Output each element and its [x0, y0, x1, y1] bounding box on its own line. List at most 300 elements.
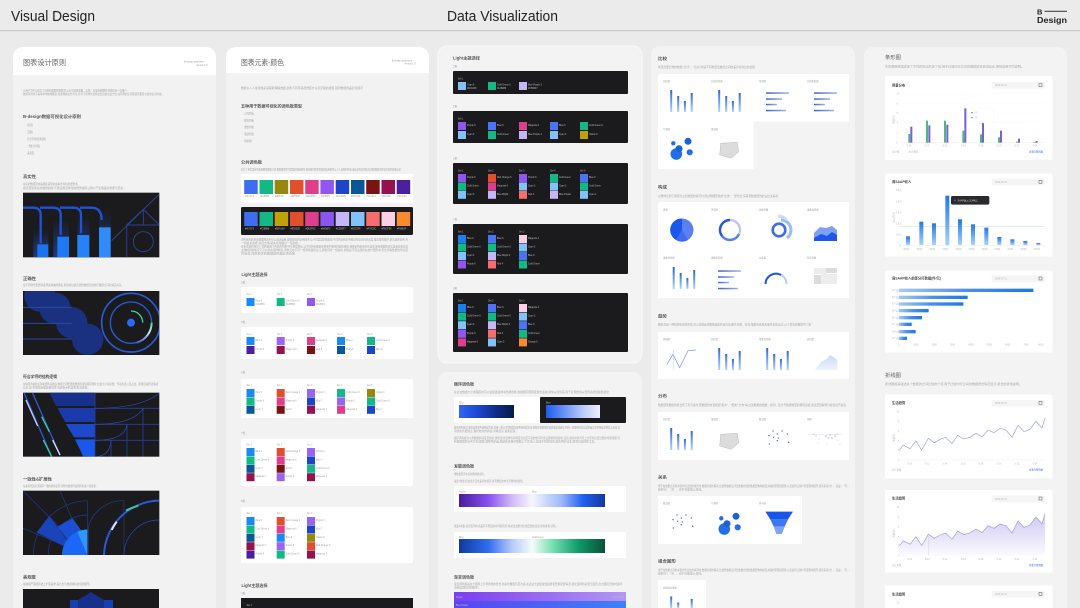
section: composition [658, 184, 849, 298]
dark palette: 3 rows: Set 4 [550, 170, 556, 172]
dark palette: 3 colors: #12B886 [497, 88, 507, 90]
section: composition: 以整体比例了解部分占比数据的情况时,通过构图形成的"比重"、"部分比"来呈现数据结构的占比关系的 [658, 194, 778, 198]
dark palette: 3 colors [453, 64, 628, 94]
principle list: · 一致性与扩展性 [26, 144, 40, 148]
dark palette: 3 rows [453, 156, 628, 204]
section: trend: 面积图 [807, 337, 815, 341]
light palette: 5 rows: Magenta 6 [286, 527, 297, 530]
card: grouped bar chart: 10 [897, 93, 900, 95]
light palette: 5 rows: Set 3 [307, 512, 313, 515]
panel: dark theme palettes [438, 46, 642, 363]
card: MAP bar chart with tooltip: 06/01 [1008, 249, 1014, 251]
dark palette: 3 rows: Set 3 [519, 170, 525, 172]
card: grouped bar chart: 6 [897, 113, 899, 115]
light palette: 5 rows: 8色 [241, 499, 246, 503]
card: horizontal bar chart: H产品 [892, 336, 899, 340]
dark palette: 3 rows: Magenta 6 [497, 184, 509, 187]
card: MAP bar chart with tooltip: 0.5万 [896, 233, 902, 236]
card: MAP bar chart with tooltip: 05/28 [956, 249, 962, 251]
gradient swatches [454, 592, 626, 608]
section: relation [658, 474, 851, 544]
section: distribution: 分布 [658, 392, 667, 400]
dark palette: 4 rows: Blue 6 [497, 238, 504, 240]
sequential ramp light: Blue [459, 402, 464, 404]
dark palette swatches: #FBCFE6 [382, 228, 392, 230]
light palette: 5 rows: Set 1 [246, 512, 253, 515]
panel: chart elements colour: Version 1.0 [404, 62, 416, 66]
panel: chart elements colour: B-design guidelines [392, 60, 413, 62]
dark palette: 3 rows: Red 4 [528, 194, 535, 196]
card: area chart: 5-22 [1015, 559, 1020, 561]
card: line chart: 5-16 [961, 463, 966, 465]
light palette: 3 rows: Yellow 6 [376, 392, 385, 394]
card: line chart: 5-22 [1015, 463, 1020, 465]
light palette: 2 rows: Magenta 8 [286, 348, 297, 351]
heading: Visual Design: Visual Design [11, 9, 95, 25]
card: line chart: 5-14 [943, 463, 948, 465]
light palette: 4 rows: Magenta 6 [286, 458, 297, 461]
dark palette: 4 rows: Blue 6 [467, 238, 474, 240]
card: grouped bar chart: 总计费用 [909, 150, 919, 154]
panel: chart examples [864, 47, 1067, 608]
card: line chart: 5-10 [907, 463, 913, 465]
dark palette: 4 rows: Set 3 [519, 230, 525, 234]
chart: bars in trend [718, 348, 741, 370]
section: distribution: 柱状图 [663, 417, 671, 421]
light palette: 5 rows: Blue 6 [286, 537, 293, 539]
card: grouped bar chart: 8 [897, 103, 899, 105]
image: pipes and columns [23, 193, 159, 257]
usage paragraph: 并且深,浅色模式的数据颜色都必须清晰 [241, 252, 295, 256]
panel: chart elements colour: 在几个场景里多色调用图形都能分辨,根据数据不同类型的调用顺序,保持相同视觉层级和使用顺序以人人使用的色彩,保证多色彩的情况,调研数据可视化的颜色数量比率 [241, 168, 401, 172]
light palette swatches: #4071F5 [245, 196, 255, 198]
card: MAP bar chart with tooltip: 05/30 [982, 249, 988, 251]
card: grouped bar chart: 5-24 [1033, 146, 1038, 148]
dark palette: 3 rows: Cyan 3 [559, 185, 567, 187]
panel: chart examples: 条形图用来描述多个不同的对比的多个值,用于比较时行之间的数据增长情况显示,便捷使用不同说明。 [885, 64, 1024, 68]
dark palette: 5 rows: Blue 6 [497, 307, 504, 309]
heading: line charts: 折线图 [885, 371, 901, 379]
card: line chart: 0 [898, 460, 900, 462]
section: relation: 用于在数据之间的关联分析比较的情况时,数据内部的联系,比如两数据之间及数据内部的数据结构构成及关联的原因和结果,以及如何让用户有逻辑地展开,用手来说"对......还是"、"有...... [658, 484, 851, 488]
light palette: 4 rows: Purple 6 [286, 475, 295, 478]
heading: sequential: 顺序调色板 [454, 380, 475, 388]
card: horizontal bar chart: 5000 [987, 345, 993, 347]
section: composition: 环形图 [711, 208, 719, 212]
light palette: 5 rows: Cyan 7 [256, 537, 264, 539]
card: line chart: 总计用量 [892, 467, 902, 471]
card: grouped bar chart: 2 [897, 132, 899, 134]
section: trend: 折线图 [663, 337, 671, 341]
light palette swatches: #9256F0 [321, 196, 331, 198]
section: composition: 玫瑰环图 [759, 208, 769, 212]
light palette: 4 rows: Blue 6 [256, 451, 263, 453]
light palette swatches: #98870F [275, 196, 285, 198]
principle list [26, 123, 46, 155]
card: MAP bar chart with tooltip: 06/02 [1021, 249, 1027, 251]
panel: sequential, diverging and gradient palettes [438, 372, 642, 608]
palette type list: · 顺序调色板 [243, 118, 254, 122]
light palette: 3 rows: Purple 6 [346, 399, 355, 402]
dark palette: 3 rows: Cold Green [467, 184, 479, 187]
section: composition: 堆叠柱状图 [663, 256, 675, 260]
chart: pie [670, 218, 694, 242]
principle list: · 真实性 [26, 123, 33, 127]
light palette: 3 colors: Blue 6 [256, 300, 263, 302]
card: area chart: 5-24 [1033, 559, 1038, 561]
card: horizontal bar chart: E产品 [892, 315, 899, 319]
card: MAP bar chart with tooltip: 05/31 [995, 249, 1001, 251]
card: grouped bar chart: 5-18 [979, 146, 984, 148]
dark palette: 3 rows: 6色 [453, 156, 458, 160]
heading: 5: 美观度 [23, 574, 37, 580]
light palette: 3 rows: Set 5 [367, 384, 373, 387]
diverging ramp: purple to blue: Purple [459, 490, 466, 494]
principle list: · 美观度 [26, 151, 34, 155]
section: combination: 柱线混合图表 [663, 586, 677, 590]
sequential notes: 判断数据的分布方向,根据,调整色阶差,能够在使用时根据上下文可以,适应不同的情况,避免色阶过多,增强可读性的工具。 [454, 440, 597, 444]
card: horizontal bar chart: 4000 [968, 345, 974, 347]
panel: sequential, diverging and gradient palettes: 渐变调色板是在大面积上引导视线的形式,色彩优雅更有层次感,在表达大的连续性趋势和形象配置情况,建议选择色彩更为强烈,在大面积比较时选择 [454, 582, 622, 586]
section: relation: 漏斗图 [759, 501, 767, 505]
dark palette: 5 rows: Set 1 [458, 300, 464, 302]
light palette: 4 rows: Set 1 [246, 444, 253, 446]
light palette: 3 rows: Cold Green 6 [376, 399, 390, 402]
dark strip at the bottom: Set 1 [246, 604, 253, 607]
section: trend: 柱状图 [711, 337, 719, 341]
light palette: 5 rows: Cold Green 6 [286, 553, 300, 556]
light palette: 3 rows: Red Orange 6 [286, 391, 301, 394]
chart: grouped horizontal bars [814, 92, 837, 111]
chart: line [667, 350, 696, 369]
chart: scatter [768, 430, 789, 445]
light palette: 3 rows: Set 3 [307, 384, 313, 387]
dark palette: 2 rows: Set 1 [458, 118, 464, 120]
card: line chart: 5-24 [1033, 463, 1038, 465]
dark palette: 4 rows: Set 1 [458, 230, 464, 234]
heading: 2: 正确性 [23, 275, 37, 282]
section: composition: 矩形树图 [807, 256, 817, 260]
light palette: 2 rows: 5色 [241, 320, 246, 324]
card: area chart: 8 [898, 517, 900, 519]
light palette: 2 rows: Set 3 [307, 333, 313, 336]
panel: sequential, diverging and gradient palettes: 渐变2色板:适合表现中点差异不明显的中间值情况,色彩过渡相对比较自然的过渡,用色柔和,清晰。 [454, 524, 558, 528]
section: comparison: 雷达图 [711, 127, 719, 131]
dark palette: 5 rows: Set 3 [519, 300, 525, 302]
heading: light theme: Light主题选择 [242, 271, 268, 278]
gradient swatches: Blue Purple [456, 604, 469, 607]
card: line chart: 用量(次) [891, 433, 895, 442]
dark palette: 2 rows: Cold Green [497, 133, 509, 136]
section: distribution: 地图 [807, 417, 812, 421]
dark palette: 5 rows: 8色 [453, 286, 458, 290]
light palette: 3 rows: Magenta 7 [316, 408, 328, 411]
diverging ramp: blue to green [454, 532, 626, 558]
card: horizontal bar chart: 6000 [1005, 345, 1011, 347]
usage paragraph: 一组最多选择,并且合理,避免使用超过一定颜色。 [241, 241, 301, 245]
light palette: 2 rows: Cyan 8 [346, 349, 354, 351]
dark palette: 2 rows: Cyan 3 [467, 134, 475, 136]
light palette: 5 rows: Purple 6 [316, 519, 325, 522]
dark palette swatches: #DE3F8C [306, 228, 316, 230]
dark palette swatches: #F76C6C [366, 228, 377, 230]
panel: sequential, diverging and gradient palettes: 清晰度更高的数字。 [454, 586, 481, 590]
principle list: · 符合字特的结构逻辑 [26, 137, 46, 141]
chart: stacked area [814, 226, 837, 241]
intro text [23, 88, 164, 96]
panel: chart types [651, 46, 855, 608]
dark palette: 5 rows: Cold Green [528, 332, 540, 335]
heading: 3: 符合字特的结构逻辑 [23, 373, 58, 380]
light palette: 2 rows: Set 2 [277, 333, 283, 336]
dark palette: 2 rows: Cold Green 6 [589, 124, 603, 127]
light palette: 3 rows: Cold Green 6 [346, 391, 360, 394]
section: comparison: 常见需要比较的数据,"比不"、"比好"的是不同类型及数值之间的差异化对比的表格 [658, 65, 755, 69]
heading: diverging: 发散调色板 [454, 462, 475, 470]
dark palette: 5 rows: Purple 6 [467, 332, 476, 335]
light palette: 3 rows: Red 8 [286, 409, 293, 411]
card: line chart: 5-20 [997, 463, 1002, 465]
dark palette: 4 rows: Magenta 2 [528, 237, 540, 240]
panel: chart design principles: 真实的数据反映是图表呈现的基本条件和重要要求。 [23, 182, 80, 186]
dark palette: 3 rows: Blue Purple [559, 193, 572, 196]
dark palette swatches: #4071F5 [245, 228, 255, 230]
heading: bar charts: 条形图 [885, 53, 901, 61]
logo: B Design [1037, 8, 1067, 25]
card: horizontal bar chart: G产品 [892, 329, 899, 333]
card: grouped bar chart: 5-14 [943, 146, 948, 148]
dark palette: 2 rows: Blue Purple 3 [528, 133, 543, 136]
card: horizontal bar chart: 周SAAP收入前等分打数据(件/元) [892, 276, 941, 281]
card: area chart: 2 [898, 546, 900, 548]
panel: chart design principles [13, 47, 216, 608]
light palette: 2 rows: Red 8 [316, 349, 323, 351]
light palette: 3 colors: #9256F0 [316, 304, 326, 306]
sequential notes [454, 426, 620, 444]
light palette: 3 rows: Set 4 [337, 384, 343, 387]
light palette: 3 rows: Cyan 7 [256, 409, 264, 411]
header bar [0, 8, 1080, 31]
card: MAP bar chart with tooltip: 2.0万 [896, 200, 902, 203]
dark palette: 5 rows: Blue Bright 3 [497, 323, 511, 326]
card: MAP bar chart with tooltip: 0 [899, 245, 901, 247]
dark palette: 5 rows: Blue 6 [467, 307, 474, 309]
dark palette: 3 colors: 3色 [453, 64, 458, 68]
card: line chart: 2 [898, 450, 900, 452]
card: grouped bar chart: 20 [975, 113, 978, 115]
dark palette: 3 rows: Cold Green [589, 184, 601, 187]
sequential notes: 字颜色也要随之,保持较好的阅读,清晰度高,避免混淆。 [454, 429, 518, 433]
sequential ramp dark: Blue [546, 402, 551, 404]
diverging ramp: purple to blue: Blue [532, 492, 537, 494]
panel: chart design principles: Version 1.0 [196, 64, 208, 67]
dark palette: 3 rows: Set 5 [580, 170, 586, 172]
dark palette swatches [241, 207, 413, 235]
card: cropped line chart: 10 [897, 603, 900, 605]
light palette: 3 rows: Set 1 [246, 384, 253, 387]
card: area chart: 生活趋势 [892, 496, 906, 501]
panel: chart design principles: 在多场景里必须保持一致的视觉表现,同样的数据传递相同的语义和感受。 [23, 484, 98, 488]
card: MAP bar chart with tooltip: 06/03 [1034, 249, 1041, 251]
card: area chart: 6 [898, 527, 900, 529]
dark strip at the bottom [241, 592, 413, 608]
panel: sequential, diverging and gradient palettes: 在表达数据大小或程度时可以使用连续的单色调色板,色相相同而明度依次递减,通常从浅到深,用于表现数值从低到高的连续性变化 [454, 390, 609, 394]
light palette swatches: #E0502D [290, 196, 300, 198]
intro text: 以用户为中心建立了清晰的数据视觉原则,让信息能够准确、高效、直接地被理解,传递给每一位用户。 [23, 88, 129, 92]
dark palette: 2 rows: Blue 6 [497, 125, 504, 127]
card: line chart: 2024-07-01 [995, 403, 1008, 405]
dark palette: 3 colors: Cold Green 6 [497, 84, 511, 86]
dark palette: 2 rows [453, 104, 628, 143]
light palette: 2 rows: Blue 8 [376, 349, 383, 351]
section: comparison: 气泡图 [663, 127, 671, 131]
card: area chart: 查看完整明细 [1029, 563, 1044, 567]
light palette swatches: #96124E [382, 196, 391, 198]
card: MAP bar chart with tooltip: 2.5万 [896, 189, 902, 192]
light palette: 3 rows: Blue 6 [256, 392, 263, 394]
card: horizontal bar chart: D产品 [892, 308, 899, 312]
chart: bars distribution [670, 428, 693, 450]
dark palette: 3 rows: Cold Green [559, 176, 571, 179]
card: area chart: 5-10 [907, 559, 913, 561]
panel: chart design principles: 在确保严谨的基础上扩展美学,设计出与数据相得益彰的图形。 [23, 582, 92, 586]
light palette: 3 rows: Blue 7 [316, 400, 323, 402]
dark palette: 3 rows: Red Orange 6 [497, 176, 512, 179]
dark palette: 4 rows: Blue 6 [528, 255, 535, 257]
dark palette: 3 colors: #C5B6F7 [528, 88, 538, 90]
dark palette: 4 rows: 7色 [453, 218, 458, 222]
sequential notes: 顺序调色板时,通常选择单色或相近色系,使用一组以不同明度及颜色饱和度变化,能够体现数据的递增或递减趋势,色相一定要保持对比度的差异化并保证在明度上变化,文 [454, 426, 620, 430]
light palette: 2 rows [241, 320, 413, 359]
light palette: 3 rows: Magenta 6 [346, 408, 358, 411]
chart: stacked horizontal bars [718, 270, 741, 289]
section: relation: 气泡图 [711, 501, 719, 505]
light palette: 4 rows: 7色 [241, 431, 246, 435]
palette type list: · 渐变调色板 [243, 132, 254, 136]
logo: B Design: B [1037, 8, 1043, 16]
card: MAP bar chart with tooltip: SAAP收入:3,344元 [958, 198, 978, 202]
light palette: 5 rows: Purple 8 [256, 553, 265, 556]
section: trend [658, 312, 849, 379]
panel: chart design principles: 在不同场景里能够选择最准确的图表,能够通过最直观的数据比较揭示数据之间的真实关系。 [23, 283, 124, 287]
dark palette: 5 rows: Cold Green 6 [497, 315, 511, 318]
card: grouped bar chart: 5-20 [997, 146, 1002, 148]
card: area chart: 总计用量 [892, 563, 902, 567]
chart: scatter relation [672, 514, 693, 529]
light palette: 3 colors: 3色 [241, 280, 246, 284]
section: comparison: 柱状图 [663, 79, 671, 83]
light palette: 2 rows: Set 5 [367, 333, 373, 336]
card: horizontal bar chart: A产品 [892, 288, 899, 292]
panel title: 图表设计原则 [23, 57, 66, 67]
card: horizontal bar chart: F产品 [892, 322, 899, 326]
chart: stacked bars in trend [766, 348, 789, 370]
card: area chart: 5-20 [997, 559, 1002, 561]
light palette: 3 rows [241, 370, 413, 418]
card: area chart: 5-16 [961, 559, 966, 561]
light palette: 3 rows: 6色 [241, 370, 246, 374]
card: MAP bar chart with tooltip: 05/26 [929, 249, 936, 251]
light palette: 4 rows: Blue 7 [316, 459, 323, 461]
light palette: 2 rows: Blue 6 [256, 340, 263, 342]
dark palette swatches: #BFA10A [275, 228, 285, 230]
light palette: 4 rows: Cyan 7 [256, 468, 264, 470]
card: area chart: 4 [898, 536, 900, 538]
section: composition: 堆叠条形图 [711, 256, 723, 260]
panel: sequential, diverging and gradient palettes: 渐变1色板:适合表示正负差异的情况,具有明显的中点与两端的颜色。 [454, 479, 525, 483]
chart: radar distribution [720, 433, 739, 449]
light palette swatches: #1C45C8 [336, 196, 346, 198]
dark palette swatches: #E0502D [290, 228, 300, 230]
card: line chart: 5-12 [925, 463, 930, 465]
section: distribution: 雷达图 [711, 417, 719, 421]
panel title: 图表元素-颜色 [241, 57, 284, 67]
chart: treemap [814, 268, 837, 284]
dark palette swatches: #8A56F0 [321, 228, 331, 230]
light palette: 4 rows: Magenta 7 [256, 475, 267, 478]
card: grouped bar chart: 0 [897, 142, 899, 144]
dark palette: 3 rows: Set 2 [488, 170, 494, 172]
light palette: 5 rows: Magenta 7 [256, 544, 267, 547]
card: area chart: 10 [897, 507, 900, 509]
light palette: 5 rows: Cold Green 6 [256, 527, 270, 530]
dark palette swatches: #F98B2F [397, 228, 407, 230]
card: MAP bar chart with tooltip: 05/25 [917, 249, 923, 251]
card: grouped bar chart: 查看完整明细 [1029, 150, 1044, 154]
card: line chart: 生活趋势 [892, 400, 906, 405]
panel: chart examples: 折线图用来描述多个数据的之间比较的个值,用于比较时行之间的数据增长情况显示,组合的折线说明。 [885, 382, 1022, 386]
light palette: 4 rows: Set 2 [277, 444, 283, 446]
card: grouped bar chart: 4 [897, 123, 899, 125]
chart: donut [720, 220, 740, 240]
section: trend: 图表也是一种回望历史的形式,可以清晰反映数据趋势的走向及规律,预测、变化,根据历史和未来的表现,反之,从个体化的数据中了解 [658, 322, 811, 326]
section: relation: 关系 [658, 474, 667, 480]
section: combination: 组合图形 [658, 558, 677, 564]
card: grouped bar chart: 总计数 [892, 150, 900, 154]
light palette swatches: #12B886 [260, 196, 270, 198]
light palette: 2 rows: Set 4 [337, 333, 343, 336]
dark palette: 5 rows: Cold Green 6 [467, 315, 481, 318]
heading: second light theme: Light主题选择 [242, 582, 268, 589]
light palette: 5 rows: Blue 6 [256, 520, 263, 522]
card: horizontal bar chart: 3000 [950, 345, 956, 347]
card: line chart: 查看完整明细 [1029, 467, 1044, 471]
light palette: 4 rows: Purple 6 [316, 450, 325, 453]
light palette: 2 rows: Cold Green 6 [376, 339, 390, 342]
card: horizontal bar chart [885, 271, 1052, 353]
card: grouped bar chart: 2024-07-01 [995, 85, 1008, 87]
panel: sequential, diverging and gradient palettes: 用数据展示中点向两端的变化。 [454, 472, 486, 476]
dark palette: 3 rows: Set 1 [458, 170, 464, 172]
section: composition: 构成 [658, 184, 668, 190]
card: MAP bar chart with tooltip: 2024-07-01 [995, 182, 1008, 184]
dark palette: 4 rows: Cold Green 6 [467, 246, 481, 248]
heading: palette types: 五种用于数据可视化的调色板类型 [241, 102, 302, 110]
card: line chart: 6 [898, 431, 900, 433]
light palette: 3 rows: Magenta 6 [286, 399, 297, 402]
panel: chart design principles: 图表要能够反映数据趋势,不要使用误导性的视觉编码让用户产生偏差的判断与结论。 [23, 186, 126, 190]
diverging ramp: purple to blue [454, 486, 626, 512]
light palette: 4 rows: Cold Green 6 [316, 467, 330, 470]
light palette: 2 rows: Magenta 6 [316, 339, 328, 342]
light palette: 2 rows: Set 1 [246, 333, 253, 336]
card: line chart: 8 [898, 422, 900, 424]
image: sectors and arcs [23, 491, 159, 555]
light palette: 4 rows: Cold Green 6 [256, 458, 270, 461]
section: comparison: 条形图 [759, 79, 767, 83]
light palette: 3 colors: Set 1 [246, 293, 253, 296]
card: horizontal bar chart: 2000 [932, 345, 938, 347]
